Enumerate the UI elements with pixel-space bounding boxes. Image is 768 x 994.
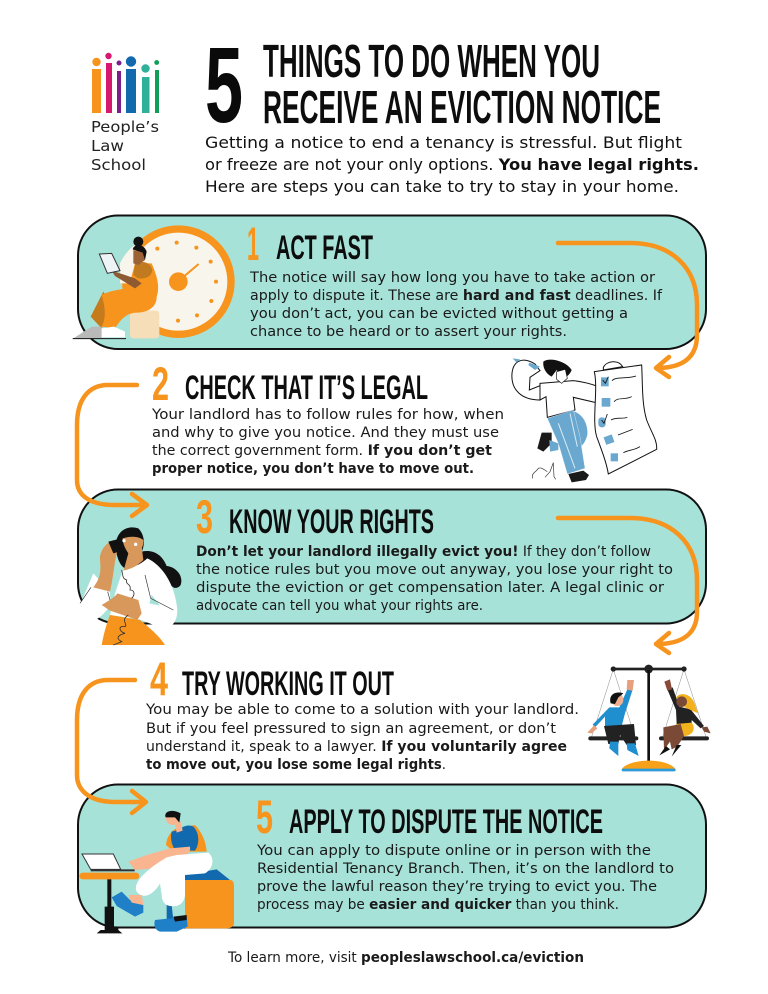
body text: chance to be heard or to assert your rights. [250,324,567,340]
body text: and why to give you notice. And they must use [152,425,499,441]
body text: understand it, speak to a lawyer. If you voluntarily agree [146,739,567,755]
body text: advocate can tell you what your rights are. [196,598,483,614]
arrow: step 2 to step 3 [77,385,147,516]
body text [249,270,663,340]
arrow: step 3 to step 4 [558,518,697,653]
logo mark [92,53,159,113]
panel: step 1 act fast [73,216,706,349]
panel background [78,216,706,349]
panel: step 4 try working it out [145,652,711,773]
logo wordmark: Law [91,137,124,155]
icon: man at laptop on stool [79,811,234,933]
panel: step 2 check that it's legal [151,357,657,482]
body text: The notice will say how long you have to take action or [249,270,655,286]
arrow: step 1 to step 2 [558,243,697,377]
body text: apply to dispute it. These are hard and fast deadlines. If [250,288,663,304]
body text [256,843,674,913]
panel: step 3 know your rights [74,490,706,645]
body text: you don’t act, you can be evicted without getting a [250,306,628,322]
body text: Your landlord has to follow rules for how, when [151,407,504,423]
body text [145,702,579,773]
body text: You can apply to dispute online or in person with the [256,843,651,859]
heading: act fast: ACT FAST [276,229,373,267]
body text [196,544,673,614]
heading: check that it's legal: CHECK THAT IT’S LEGAL [185,369,428,407]
icon: balance scale with two people [587,665,711,771]
body text [151,407,504,477]
footer link: To learn more, visit peopleslawschool.ca/eviction [227,950,584,966]
step number 2: 2 [152,357,169,410]
logo: People's Law School [91,53,159,174]
icon: woman holding checklist [512,358,657,482]
body text: But if you feel pressured to sign an agreement, or don’t [146,721,557,737]
intro text [205,133,699,196]
heading lines [263,35,661,133]
step number 5: 5 [256,790,273,843]
title [205,24,661,145]
panel background [78,784,706,928]
body text: the notice rules but you move out anyway, you lose your right to [196,562,673,578]
icon: clock and woman reading tablet [73,229,231,339]
intro text: or freeze are not your only options. You have legal rights. [205,155,699,174]
intro text: Here are steps you can take to try to stay in your home. [205,177,679,196]
logo wordmark: School [91,156,146,174]
heading: try working it out: TRY WORKING IT OUT [182,665,394,703]
body text: You may be able to come to a solution with your landlord. [145,702,579,718]
intro text: Getting a notice to end a tenancy is stressful. But flight [205,133,682,152]
logo wordmark: People’s [91,118,159,136]
logo wordmark [91,118,159,174]
body text: proper notice, you don’t have to move out. [152,461,474,477]
body text: process may be easier and quicker than you think. [257,897,619,913]
arrow: step 4 to step 5 [77,680,146,813]
body text: Don’t let your landlord illegally evict you! If they don’t follow [196,544,651,560]
body text: the correct government form. If you don’t get [152,443,492,459]
step number 3: 3 [196,490,213,543]
body text: Residential Tenancy Branch. Then, it’s on the landlord to [257,861,674,877]
panel: step 5 apply to dispute the notice [78,784,706,933]
body text: dispute the eviction or get compensation later. A legal clinic or [196,580,664,596]
panel: step 1 act fast: 1 [247,217,259,270]
body text: to move out, you lose some legal rights. [146,757,446,773]
heading: know your rights: KNOW YOUR RIGHTS [229,503,434,541]
panel background [78,490,706,624]
step number 4: 4 [150,652,168,705]
body text: prove the lawful reason they’re trying to evict you. The [257,879,657,895]
icon: woman on telephone [74,527,181,645]
big number 5: 5 [205,24,243,145]
